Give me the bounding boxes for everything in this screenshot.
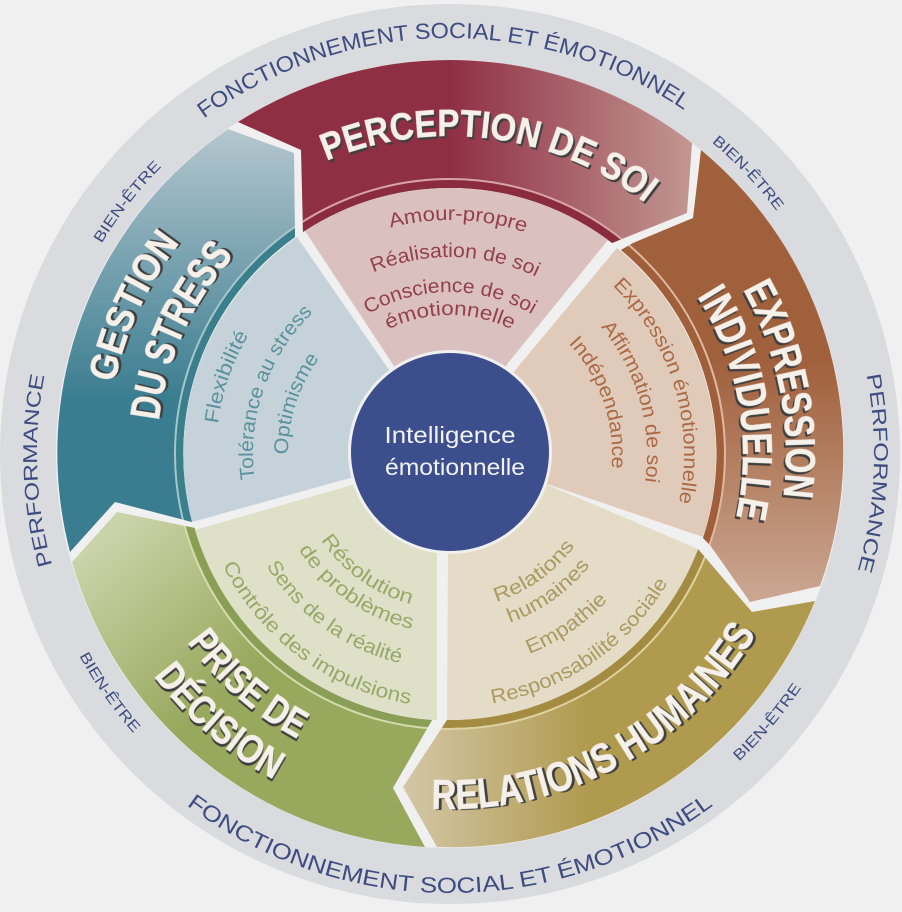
ring: relations — [440, 549, 706, 730]
ring: gestion — [174, 226, 295, 522]
item: amour-propre: Amour-propre — [390, 209, 526, 232]
wedge: relations — [447, 452, 698, 720]
outer ring label: fonctionnement bottom: FONCTIONNEMENT SOCIAL ET ÉMOTIONNEL — [188, 794, 713, 894]
outer ring label: fonctionnement top: FONCTIONNEMENT SOCIAL ET ÉMOTIONNEL — [196, 22, 685, 118]
ring: perception — [302, 178, 622, 243]
panel: perception de soi — [238, 60, 692, 366]
item: sens de la realite: Sens de la réalité — [268, 561, 402, 662]
item: optimisme: Optimisme — [274, 354, 318, 454]
outer ring label: performance left: PERFORMANCE — [23, 374, 52, 567]
center circle — [348, 350, 552, 554]
wedge: gestion — [183, 237, 450, 522]
ring: decision — [184, 526, 432, 729]
item: responsabilite sociale: Responsabilité sociale — [491, 580, 666, 704]
outer ring label: bien-etre top left: BIEN-ÊTRE — [94, 160, 161, 242]
outer ring label: bien-etre top right: BIEN-ÊTRE — [712, 135, 784, 210]
title: du stress: DU STRESS — [130, 240, 234, 420]
ring: expression — [621, 245, 726, 545]
item: tolerance au stress: Tolérance au stress — [238, 307, 312, 480]
title: decision: DÉCISION — [154, 660, 286, 782]
item: realisation de soi: Réalisation de soi — [370, 242, 541, 276]
item: conscience de soi: Conscience de soi — [364, 279, 538, 314]
item: empathie: Empathie — [526, 595, 606, 654]
panel: relations humaines — [403, 484, 815, 848]
band: perception — [238, 60, 692, 243]
band: decision — [72, 512, 432, 847]
center label: émotionnelle — [385, 454, 525, 480]
panel: gestion du stress — [57, 129, 390, 552]
outer ring label: bien-etre bottom left: BIEN-ÊTRE — [80, 652, 141, 733]
band: gestion — [57, 129, 295, 552]
outer ring label: performance right: PERFORMANCE — [858, 374, 888, 573]
panel: prise de decision — [72, 484, 437, 847]
item: independance: Indépendance — [570, 336, 623, 468]
item: controle des impulsions: Contrôle des impulsions — [225, 562, 410, 704]
title: prise de: PRISE DE — [188, 626, 310, 742]
band: relations — [403, 549, 815, 847]
title: perception de soi: PERCEPTION DE SOI — [318, 109, 662, 204]
item: flexibilite: Flexibilité — [204, 330, 247, 422]
wedge: decision — [195, 452, 450, 720]
item: emotionnelle: émotionnelle — [386, 300, 514, 328]
title: gestion: GESTION — [90, 227, 182, 380]
wedge: perception — [305, 188, 608, 452]
item: affirmation de soi: Affirmation de soi — [600, 323, 660, 482]
item: resolution: Résolution — [322, 533, 412, 604]
title: relations humaines: RELATIONS HUMAINES — [433, 622, 756, 810]
panel: expression individuelle — [514, 150, 844, 602]
title: individuelle: INDIVIDUELLE — [696, 283, 772, 524]
title: expression: EXPRESSION — [742, 278, 816, 500]
item: relations: Relations — [493, 542, 573, 602]
item: de problemes: de problèmes — [300, 546, 413, 628]
item: expression emotionnelle: Expression émotionnelle — [614, 277, 698, 503]
wedge: expression — [450, 248, 716, 537]
item: humaines: humaines — [506, 560, 588, 622]
band: expression — [621, 150, 843, 602]
outer ring label: bien-etre bottom right: BIEN-ÊTRE — [733, 682, 801, 760]
center label: Intelligence — [384, 422, 516, 448]
